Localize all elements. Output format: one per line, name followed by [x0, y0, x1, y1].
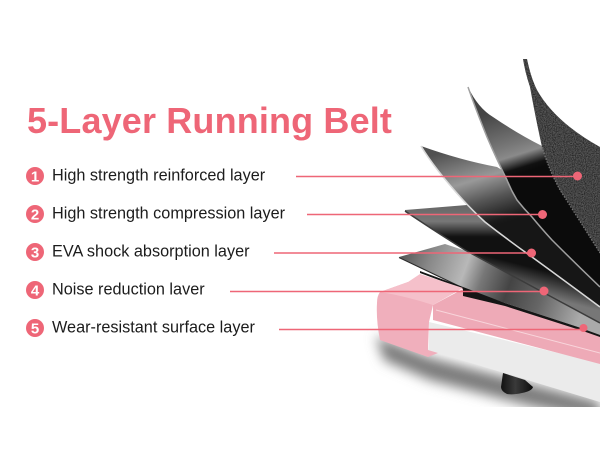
layer 3: EVA layer	[421, 146, 600, 307]
number badge 1: 1	[31, 168, 39, 186]
floor shadow	[376, 336, 600, 420]
end cap front face	[377, 282, 438, 357]
number badge 3	[26, 243, 44, 262]
layer 5: surface layer	[399, 244, 600, 336]
layer 3 edge	[421, 146, 600, 307]
layer 4: noise reduction layer	[405, 205, 600, 310]
number badge 3: 3	[31, 244, 39, 262]
number badge 4: 4	[31, 282, 40, 300]
leader line 5	[279, 324, 588, 332]
list item 1	[26, 166, 582, 186]
number badge 5	[26, 319, 44, 338]
label 1: High strength reinforced layer	[52, 166, 266, 184]
list item 2	[26, 204, 547, 224]
layer 1: textured reinforced layer	[523, 59, 600, 253]
number badge 2	[26, 205, 44, 224]
list item 4	[26, 280, 548, 300]
number badge 5: 5	[31, 320, 39, 338]
black belt strip	[420, 271, 600, 338]
label 2: High strength compression layer	[52, 204, 286, 222]
title: 5-Layer Running Belt	[27, 100, 392, 141]
list item 5	[26, 318, 588, 338]
layer 4 lower sheen	[478, 256, 600, 322]
leader line 3	[274, 248, 536, 258]
number badge 4	[26, 281, 44, 300]
leader line 2	[307, 210, 547, 219]
number badge 2: 2	[31, 206, 39, 224]
label 4: Noise reduction laver	[52, 280, 205, 298]
layer 2: compression layer	[468, 87, 600, 287]
white side panel	[429, 322, 600, 402]
leader line 1	[296, 172, 582, 180]
treadmill foot	[501, 373, 533, 394]
treadmill and belt layers illustration	[376, 59, 600, 420]
layer 1 speckled edge	[542, 147, 600, 253]
label 5: Wear-resistant surface layer	[52, 318, 255, 336]
layer 2 edge	[468, 87, 600, 287]
leader line 4	[230, 286, 548, 296]
number badge 1	[26, 167, 44, 186]
end cap top face	[380, 274, 463, 305]
pink rail	[433, 289, 600, 364]
layer 5 tip edge	[399, 258, 463, 288]
pink end cap	[377, 274, 463, 357]
layer 4 edge	[405, 211, 600, 323]
rail highlight	[436, 310, 600, 353]
list item 3	[26, 242, 536, 262]
label 3: EVA shock absorption layer	[52, 242, 250, 260]
